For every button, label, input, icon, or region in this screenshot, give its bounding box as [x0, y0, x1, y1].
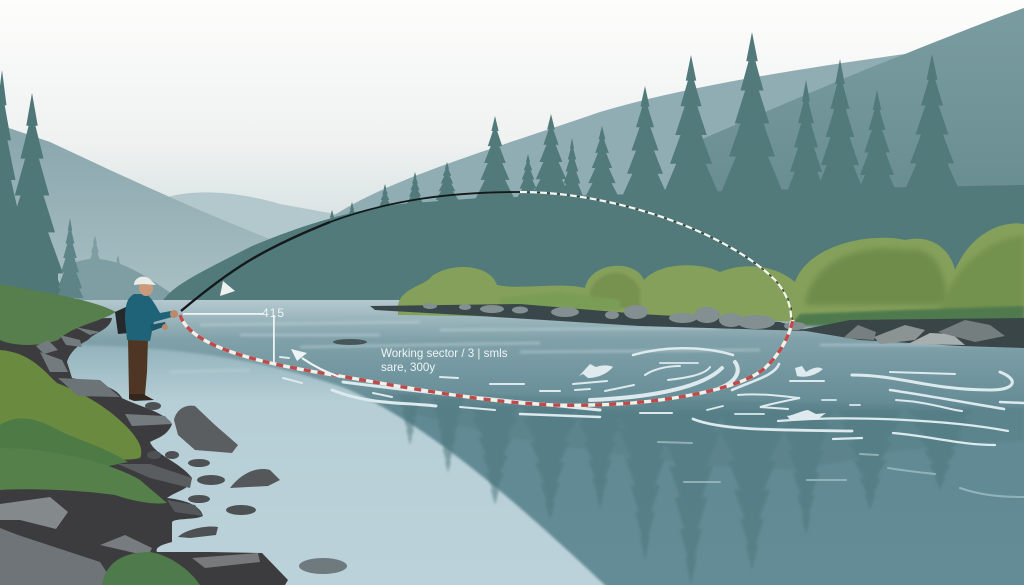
rod and line [181, 192, 792, 368]
mountain: far centre [165, 192, 350, 310]
forest: left foreground firs [0, 70, 83, 305]
measurement bracket: vertical [273, 315, 275, 365]
current swirls [280, 348, 1024, 445]
water: near shallows [60, 345, 610, 585]
faint ripple marks [658, 442, 1024, 497]
bank: dark earth [0, 318, 288, 585]
forest: left background trees [76, 235, 178, 302]
far bank: rocks [370, 303, 1024, 348]
near bank: foliage and rocks [0, 284, 288, 585]
rod and line: aerial line solid [330, 192, 520, 222]
measurement bracket: value: 415 [262, 306, 285, 320]
label: working sector: Working sector / 3 | smls [381, 347, 508, 360]
retrieve line: red and white dashed [180, 315, 793, 405]
bank: lower shrubs [0, 448, 167, 503]
label: working sector [381, 347, 508, 374]
sky [0, 0, 1024, 310]
background mountains [0, 8, 1024, 310]
rod and line: rod [181, 222, 330, 311]
arrow: cast direction [220, 281, 235, 296]
angler: head [139, 280, 153, 296]
fish marker: left [579, 364, 613, 378]
bank: upper shrubs [0, 284, 116, 345]
water: reflected forest [370, 392, 1024, 585]
angler: hands [170, 310, 178, 318]
angler [115, 277, 178, 401]
bank: rock cluster [0, 327, 260, 585]
bank: middle shrubs [0, 350, 141, 460]
water: horizontal sheen lines [170, 312, 1024, 372]
forest: right treeline [162, 32, 1024, 310]
angler: jacket [125, 294, 172, 341]
measurement bracket: horizontal [183, 313, 263, 315]
angler: trousers [128, 338, 148, 395]
mountain: near right slope [700, 8, 1024, 310]
shoreline stones [145, 339, 367, 574]
fish markers [579, 364, 826, 420]
water: river surface [60, 300, 1024, 585]
angler: cap [134, 277, 156, 285]
rod and line: aerial line dashed [520, 192, 791, 368]
angler: boots [129, 394, 154, 401]
boulder [174, 406, 238, 453]
mountain: distant right ridge [330, 54, 1024, 310]
arrow: retrieve direction [291, 349, 340, 377]
measurement bracket [183, 306, 285, 365]
label: working sector: sare, 300y [381, 361, 435, 374]
mountain: far left [0, 125, 335, 310]
angler: backpack [115, 307, 129, 334]
bank: foreground shrub [102, 552, 200, 585]
fish marker: middle [795, 366, 823, 377]
far bank: shrubs [398, 223, 1024, 326]
fish marker: lower [787, 410, 826, 420]
